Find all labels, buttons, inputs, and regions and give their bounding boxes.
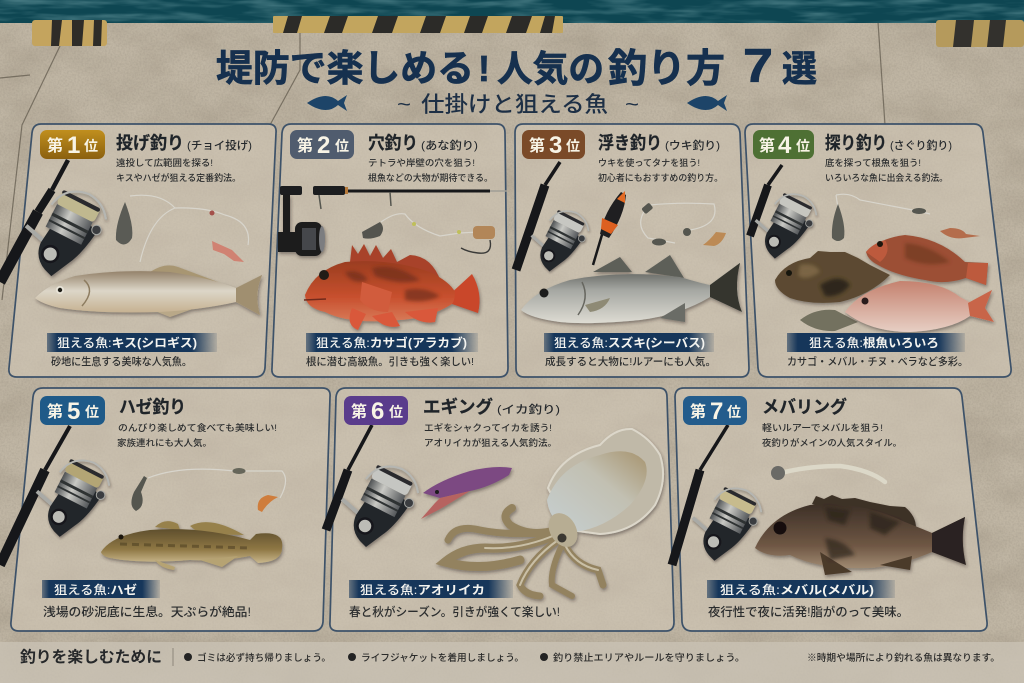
panel frame 5 (11, 388, 330, 631)
target label 7: 狙える魚: メバル(メバル) (720, 582, 874, 597)
subtitle: ~ (397, 94, 411, 116)
description 2: テトラや岸壁の穴を狙う! (368, 157, 475, 168)
fish: ハゼ (101, 521, 282, 570)
panel: 浮き釣り (515, 124, 749, 377)
reel 1 (26, 190, 106, 276)
rod tip 3 (545, 162, 560, 185)
badge 7: 第 (690, 402, 706, 421)
footer heading: 釣りを楽しむために (20, 647, 162, 666)
rod tip 6 (348, 425, 372, 470)
badge 2: 第 (297, 136, 313, 155)
badge 3: 3 (549, 132, 562, 159)
panel frame 4 (745, 124, 1011, 377)
badge 1: 位 (84, 138, 98, 154)
panel: エギング (326, 388, 674, 631)
badge 1: 第 (47, 136, 63, 155)
description 3 (598, 157, 723, 183)
badge 3: 第 (529, 136, 545, 155)
target label 4: 狙える魚:根魚いろいろ (809, 335, 939, 350)
heading sub 3: (ウキ釣り) (665, 138, 720, 152)
badge 5: 第 (47, 402, 63, 421)
description 4 (825, 157, 948, 183)
target label 7 (707, 580, 895, 598)
heading 2: 穴釣り (368, 133, 418, 153)
squid fin (548, 429, 663, 534)
heading 7: メバリング (762, 397, 847, 417)
panel frame 3 (515, 124, 749, 377)
target label 3 (544, 333, 714, 352)
rig 1 (116, 195, 249, 262)
description 3: ウキを使ってタナを狙う! (598, 157, 700, 168)
panel frame 1 (9, 124, 276, 377)
badge 6: 第 (351, 402, 367, 421)
heading 1: 投げ釣り (116, 133, 184, 153)
rod 2 (345, 190, 490, 192)
tip 1: ゴミは必ず持ち帰りましょう。 (197, 651, 331, 664)
rod grip 2 (280, 186, 391, 209)
description 2 (368, 157, 493, 183)
disclaimer: ※時期や場所により釣れる魚は異なります。 (807, 651, 1000, 664)
panel: ハゼ釣り (0, 388, 330, 631)
description 5: 家族連れにも大人気。 (117, 437, 212, 448)
rod tip 7 (700, 425, 728, 470)
fish: キス (35, 265, 262, 317)
fish: brown rockfish (775, 251, 890, 303)
target label 5: 狙える魚: ハゼ (54, 582, 137, 597)
panel: 穴釣り (272, 124, 508, 377)
description 4: 底を探って根魚を狙う! (825, 157, 921, 168)
target label 4 (787, 333, 965, 352)
badge 5: 5 (67, 398, 80, 425)
badge 3: 位 (566, 138, 580, 154)
reel 2 (278, 195, 325, 256)
badge 2 (290, 130, 354, 159)
fish: red rockfish (866, 235, 988, 285)
rod tip 1 (52, 160, 68, 190)
heading sub 1: (チョイ投げ) (187, 138, 252, 152)
description 2: 根魚などの大物が期待できる。 (368, 172, 493, 183)
badge 6: 6 (371, 398, 384, 425)
description 5 (117, 422, 277, 448)
bollard stripe centre (273, 16, 563, 33)
title: ! (478, 48, 490, 89)
badge 1 (40, 130, 105, 159)
badge 6: 位 (389, 404, 403, 420)
description 7: 軽いルアーでメバルを狙う! (762, 422, 883, 433)
note 3: 成長すると大物に!ルアーにも人気。 (545, 355, 716, 368)
water (0, 0, 1024, 23)
title: 釣り方 (608, 48, 725, 91)
heading 3: 浮き釣り (598, 133, 662, 153)
badge 4: 位 (796, 138, 810, 154)
description 1 (116, 157, 241, 183)
rod tip 4 (768, 165, 782, 185)
float 3 (593, 191, 626, 265)
subtitle: 仕掛けと狙える魚 (421, 92, 608, 117)
fish: スズキ (521, 255, 742, 323)
rod 3 (516, 185, 545, 270)
fish: メバル (755, 495, 966, 575)
target label 1 (47, 333, 217, 352)
badge 5: 位 (85, 404, 99, 420)
description 3: 初心者にもおすすめの釣り方。 (598, 172, 723, 183)
target label 1: 狙える魚: キス(シロギス) (57, 335, 197, 350)
rod 4 (750, 185, 768, 236)
description 5: のんびり楽しめて食べても美味しい! (118, 422, 277, 433)
rod 7 (672, 470, 700, 565)
panel: 探り釣り (745, 124, 1011, 377)
badge 1: 1 (67, 132, 80, 159)
heading sub 6: (イカ釣り) (497, 402, 560, 416)
bollard stripe left (32, 20, 107, 46)
note 5: 浅場の砂泥底に生息。天ぷらが絶品! (43, 604, 251, 619)
bollard stripe right (936, 20, 1024, 47)
title: 堤防で楽しめる (216, 48, 474, 89)
badge 2: 位 (335, 138, 349, 154)
target label 3: 狙える魚:スズキ(シーバス) (554, 335, 705, 350)
badge 4: 第 (759, 136, 775, 155)
rig 4 (832, 194, 980, 241)
description 1: 遠投して広範囲を探る! (116, 157, 213, 168)
description 4: いろいろな魚に出会える釣法。 (825, 172, 948, 183)
badge 4: 4 (778, 132, 792, 159)
rod mid 1 (38, 190, 52, 212)
reel 5 (37, 459, 109, 537)
heading 5: ハゼ釣り (119, 397, 186, 417)
badge 3 (522, 130, 585, 159)
panel frame 7 (675, 388, 987, 631)
squid mantle (547, 451, 647, 532)
panel frame 2 (272, 124, 508, 377)
description 7 (762, 422, 902, 448)
reel 3 (532, 210, 588, 272)
title: 人気の (497, 48, 604, 89)
squid head (543, 508, 583, 552)
rod tip 5 (45, 426, 70, 470)
badge 5 (40, 396, 105, 425)
badge 6 (344, 396, 408, 425)
icon: fish right (687, 95, 727, 111)
rig 2 (362, 214, 495, 253)
fish: pink sea bream (845, 281, 994, 332)
reel 7 (693, 487, 761, 561)
rod 1 (0, 212, 38, 282)
rod 6 (326, 470, 348, 530)
rod tip 2 (490, 190, 507, 192)
title: 選 (782, 48, 817, 89)
note 7: 夜行性で夜に活発!脂がのって美味。 (708, 604, 909, 619)
heading sub 2: (あな釣り) (421, 138, 478, 152)
heading 4: 探り釣り (825, 133, 887, 153)
panel: 投げ釣り (0, 124, 276, 377)
panel: メバリング (672, 388, 987, 631)
badge 2: 2 (317, 132, 330, 159)
fish: カサゴ (304, 244, 480, 330)
rig 5 (131, 468, 286, 512)
rig 3 (641, 202, 726, 246)
target label 5 (42, 580, 160, 598)
description 6: エギをシャクってイカを誘う! (424, 422, 552, 433)
target label 2 (306, 333, 478, 352)
badge 7: 7 (710, 398, 723, 425)
squid (445, 429, 663, 596)
description 6: アオリイカが狙える人気釣法。 (424, 437, 557, 448)
rod 5 (0, 470, 45, 565)
footer band (0, 642, 1024, 683)
heading 6: エギング (423, 397, 493, 417)
tip 3: 釣り禁止エリアやルールを守りましょう。 (553, 651, 745, 664)
description 7: 夜釣りがメインの人気スタイル。 (762, 437, 902, 448)
fish: small grey fish (800, 310, 858, 331)
description 1: キスやハゼが狙える定番釣法。 (116, 172, 241, 183)
target label 6 (349, 580, 513, 598)
tip 2: ライフジャケットを着用しましょう。 (361, 651, 524, 664)
note 1: 砂地に生息する美味な人気魚。 (51, 355, 192, 368)
squid arms (445, 508, 603, 596)
reel 4 (756, 193, 816, 259)
badge 4 (753, 130, 814, 159)
reel 6 (342, 465, 418, 547)
note 2: 根に潜む高級魚。引きも強く楽しい! (306, 355, 474, 368)
lure 7 (771, 466, 885, 482)
badge 7 (683, 396, 747, 425)
target label 6: 狙える魚: アオリイカ (360, 582, 485, 597)
subtitle: ~ (625, 94, 639, 116)
description 6 (424, 422, 557, 448)
panel frame 6 (330, 388, 674, 631)
title: 7 (743, 39, 773, 92)
lure 6 (421, 467, 512, 519)
title (216, 39, 817, 92)
note 6: 春と秋がシーズン。引きが強くて楽しい! (349, 604, 560, 619)
badge 7: 位 (727, 404, 741, 420)
heading sub 4: (さぐり釣り) (890, 138, 952, 152)
target label 2: 狙える魚:カサゴ(アラカブ) (316, 335, 467, 350)
note 4: カサゴ・メバル・チヌ・ベラなど多彩。 (787, 355, 968, 368)
icon: fish left (307, 95, 347, 111)
